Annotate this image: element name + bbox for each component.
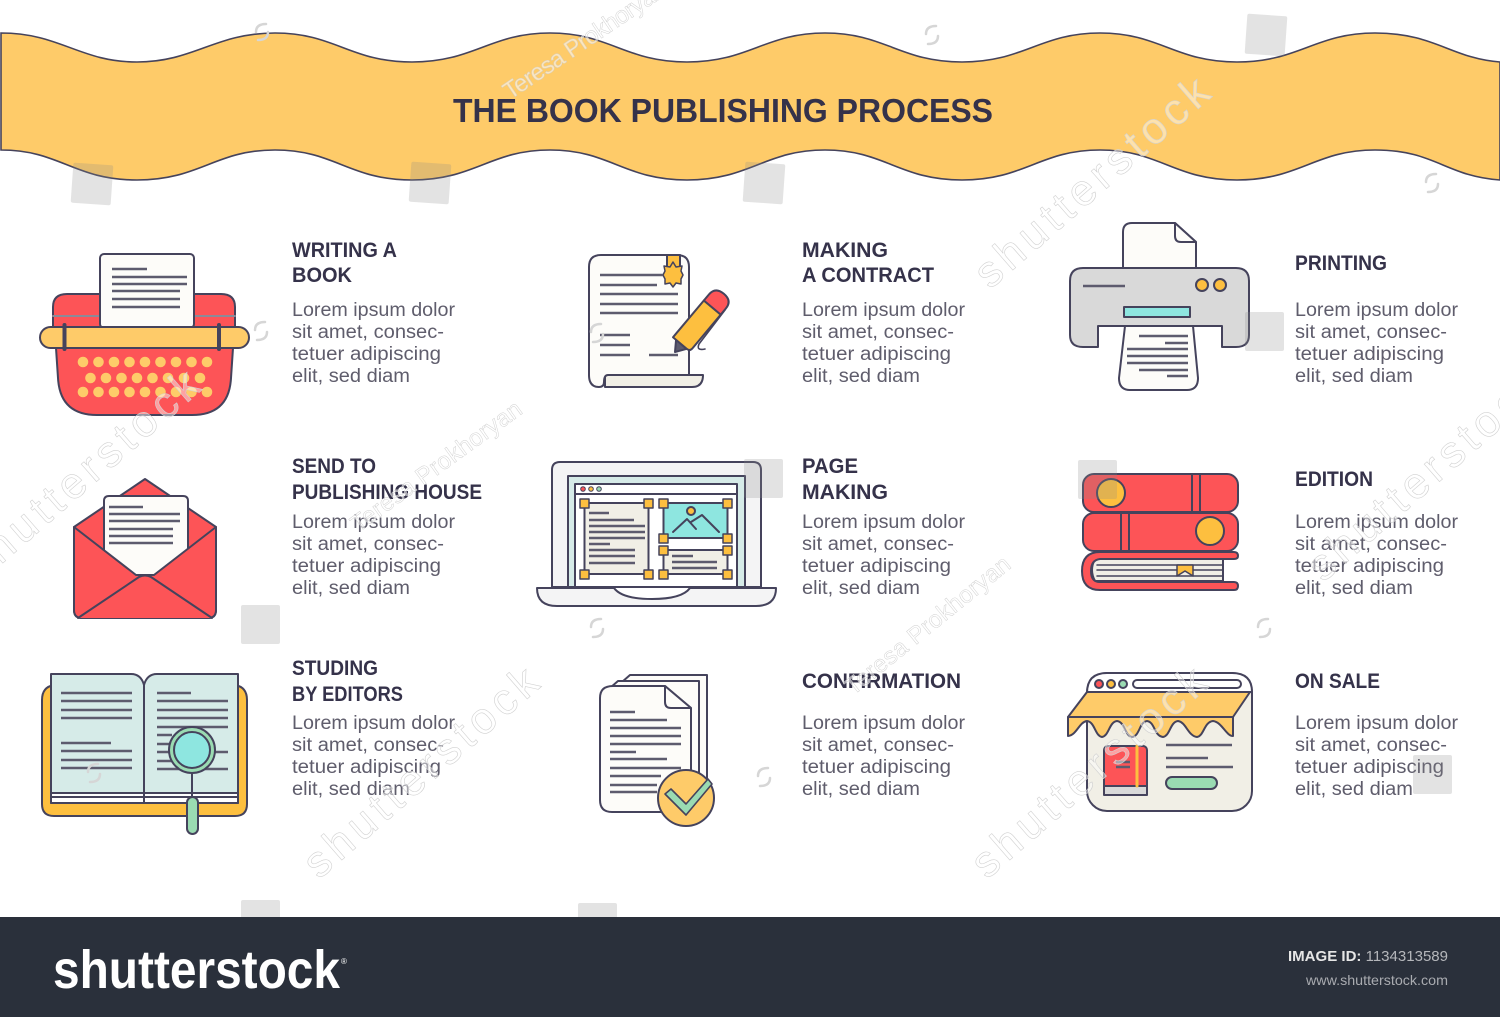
step 8 text: confirmation: elit, sed diam: [802, 779, 920, 800]
step 3 text: printing: Lorem ipsum dolor: [1295, 300, 1459, 321]
step 6 text: edition: EDITION: [1295, 468, 1373, 491]
step 6 text: edition: [1295, 468, 1459, 599]
step 1 text: writing a book: tetuer adipiscing: [292, 344, 441, 365]
registered mark: ®: [341, 957, 347, 966]
step 6 text: edition: sit amet, consec-: [1295, 534, 1447, 555]
step 7 text: studing by editors: Lorem ipsum dolor: [292, 713, 456, 734]
step 5 text: page making: tetuer adipiscing: [802, 556, 951, 577]
step 8 text: confirmation: CONFIRMATION: [802, 670, 961, 693]
step 7 text: studing by editors: [292, 657, 456, 800]
stock watermark overlay: Teresa Prokhoryan: [840, 551, 1016, 701]
step 4 text: send to publishing house: Lorem ipsum dolor: [292, 512, 456, 533]
step 7 text: studing by editors: BY EDITORS: [292, 683, 403, 706]
step 9 text: on sale: [1295, 670, 1459, 800]
step 4 text: send to publishing house: PUBLISHING HOUSE: [292, 481, 482, 504]
step 1 text: writing a book: sit amet, consec-: [292, 322, 444, 343]
step 6 text: edition: Lorem ipsum dolor: [1295, 512, 1459, 533]
icon: envelope: [74, 479, 216, 618]
icon: document with check mark: [600, 675, 714, 826]
step 2 text: making a contract: Lorem ipsum dolor: [802, 300, 966, 321]
website url: www.shutterstock.com: [1305, 972, 1448, 988]
step 8 text: confirmation: Lorem ipsum dolor: [802, 713, 966, 734]
icon: laptop with page layout: [537, 462, 776, 606]
step 2 text: making a contract: A CONTRACT: [802, 264, 934, 287]
step 9 text: on sale: sit amet, consec-: [1295, 735, 1447, 756]
step 6 text: edition: tetuer adipiscing: [1295, 556, 1444, 577]
stock watermark overlay: shutterstock: [961, 656, 1217, 888]
step 9 text: on sale: elit, sed diam: [1295, 779, 1413, 800]
stock watermark overlay: shutterstock: [293, 656, 549, 888]
step 6 text: edition: elit, sed diam: [1295, 578, 1413, 599]
step 8 text: confirmation: [802, 670, 966, 800]
step 8 text: confirmation: tetuer adipiscing: [802, 757, 951, 778]
step 7 text: studing by editors: elit, sed diam: [292, 779, 410, 800]
step 4 text: send to publishing house: SEND TO: [292, 455, 376, 478]
step 5 text: page making: MAKING: [802, 481, 888, 504]
icon: stack of books: [1082, 474, 1238, 590]
step 5 text: page making: sit amet, consec-: [802, 534, 954, 555]
footer bar: [0, 917, 1500, 1017]
icon: open book with magnifier: [42, 674, 247, 834]
step 4 text: send to publishing house: sit amet, consec-: [292, 534, 444, 555]
step 2 text: making a contract: MAKING: [802, 239, 888, 262]
stock watermark overlay: shutterstock: [964, 66, 1220, 298]
step 9 text: on sale: ON SALE: [1295, 670, 1380, 693]
step 4 text: send to publishing house: elit, sed diam: [292, 578, 410, 599]
step 5 text: page making: PAGE: [802, 455, 858, 478]
step 2 text: making a contract: elit, sed diam: [802, 366, 920, 387]
step 8 text: confirmation: sit amet, consec-: [802, 735, 954, 756]
step 5 text: page making: [802, 455, 966, 599]
step 2 text: making a contract: [802, 239, 966, 387]
icon: printer: [1070, 223, 1249, 390]
step 1 text: writing a book: [292, 239, 456, 387]
step 7 text: studing by editors: sit amet, consec-: [292, 735, 444, 756]
step 5 text: page making: elit, sed diam: [802, 578, 920, 599]
step 3 text: printing: PRINTING: [1295, 252, 1387, 275]
step 2 text: making a contract: tetuer adipiscing: [802, 344, 951, 365]
step 1 text: writing a book: elit, sed diam: [292, 366, 410, 387]
step 9 text: on sale: tetuer adipiscing: [1295, 757, 1444, 778]
step 2 text: making a contract: sit amet, consec-: [802, 322, 954, 343]
stock watermark overlay: Teresa Prokhoryan: [346, 396, 527, 538]
step 3 text: printing: [1295, 252, 1459, 387]
step 5 text: page making: Lorem ipsum dolor: [802, 512, 966, 533]
step 4 text: send to publishing house: tetuer adipiscing: [292, 556, 441, 577]
step 1 text: writing a book: BOOK: [292, 264, 352, 287]
step 7 text: studing by editors: STUDING: [292, 657, 378, 680]
step 3 text: printing: tetuer adipiscing: [1295, 344, 1444, 365]
step 1 text: writing a book: Lorem ipsum dolor: [292, 300, 456, 321]
title text: THE BOOK PUBLISHING PROCESS: [453, 92, 993, 129]
step 9 text: on sale: Lorem ipsum dolor: [1295, 713, 1459, 734]
icon: contract: [589, 255, 732, 387]
step 3 text: printing: sit amet, consec-: [1295, 322, 1447, 343]
image id: IMAGE ID: 1134313589: [1288, 948, 1448, 965]
icon: typewriter: [40, 254, 249, 415]
title banner: [1, 33, 1500, 180]
shutterstock logo: shutterstock: [53, 940, 341, 1000]
step 4 text: send to publishing house: [292, 455, 482, 599]
step 3 text: printing: elit, sed diam: [1295, 366, 1413, 387]
step 1 text: writing a book: WRITING A: [292, 239, 397, 262]
icon: online shop: [1068, 673, 1252, 811]
step 7 text: studing by editors: tetuer adipiscing: [292, 757, 441, 778]
